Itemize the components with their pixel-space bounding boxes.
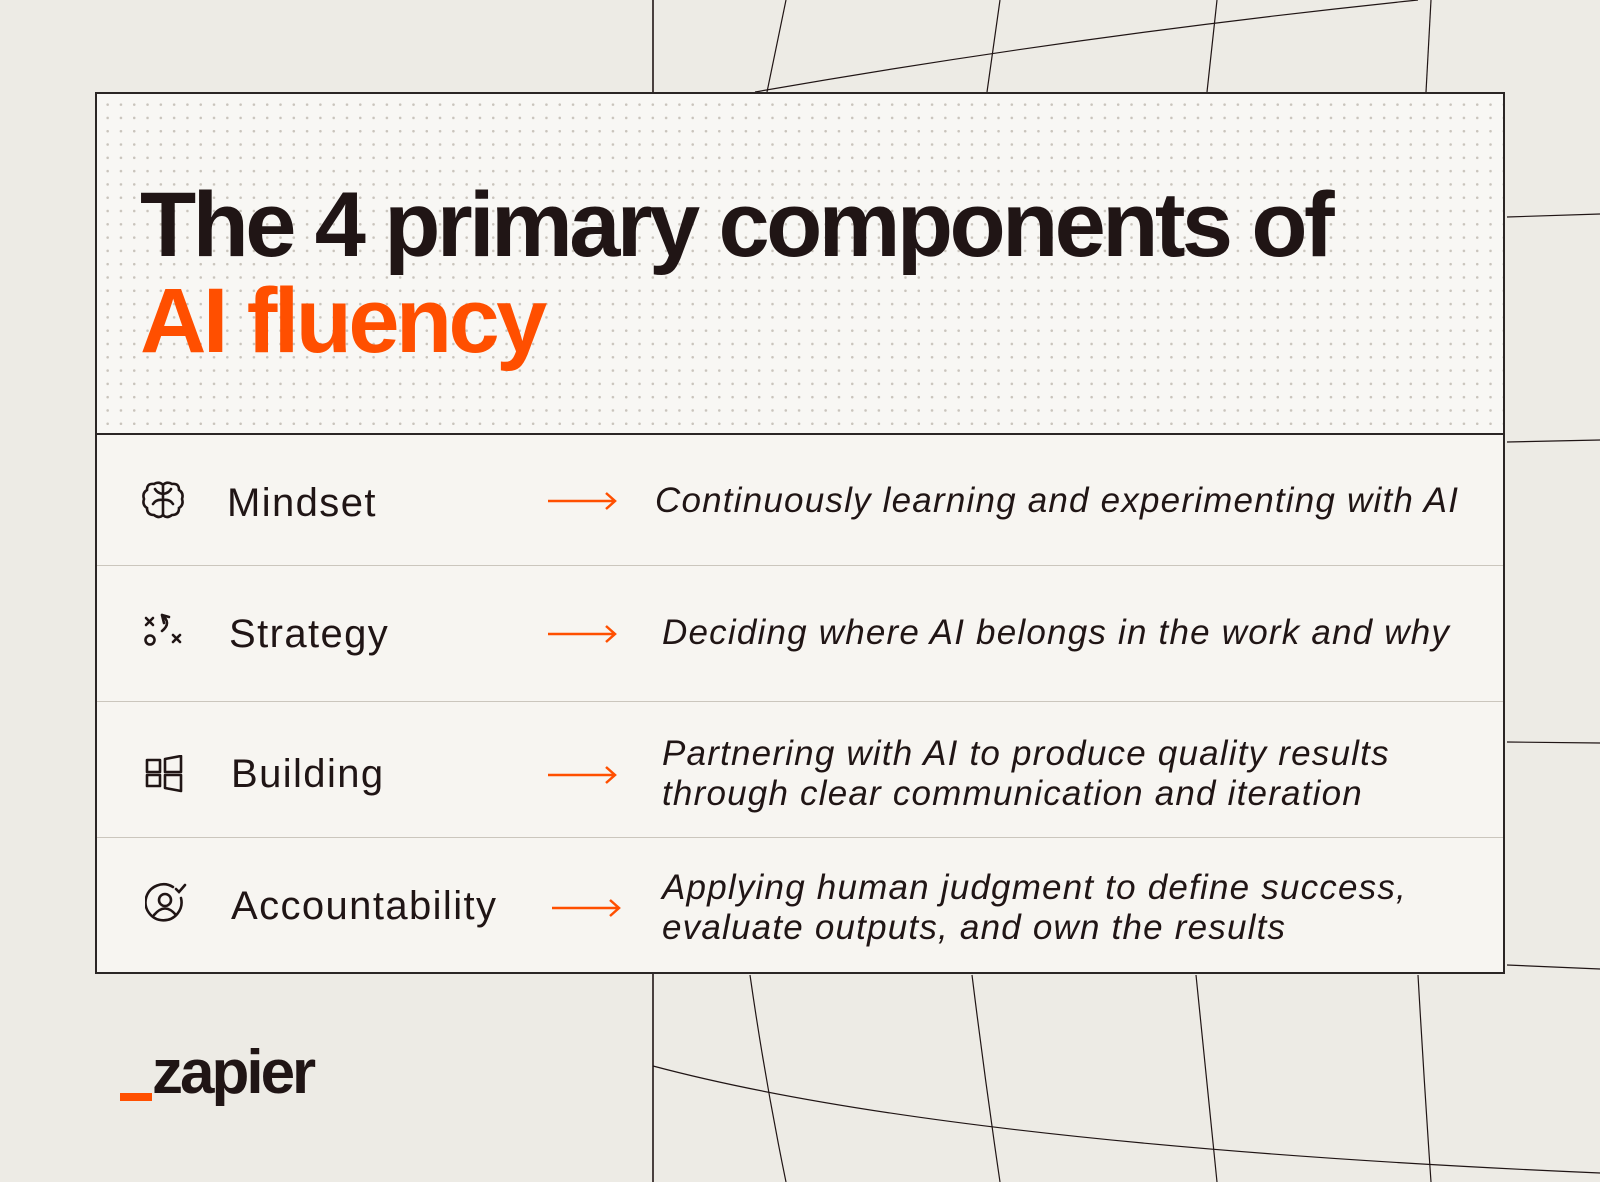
description: Partnering with AI to produce quality results: [662, 734, 1390, 773]
icon: strategy: [144, 614, 182, 646]
description: [662, 734, 1390, 813]
title: The 4 primary components of: [140, 174, 1331, 276]
arrow: [548, 492, 617, 510]
arrow: [548, 625, 617, 643]
icon: brain: [142, 481, 184, 518]
card: [95, 92, 1505, 974]
icon: person check: [145, 882, 186, 922]
description: Deciding where AI belongs in the work and why: [662, 613, 1450, 652]
description: evaluate outputs, and own the results: [662, 908, 1286, 947]
row: strategy: [97, 565, 1503, 702]
description: [660, 868, 1407, 947]
logo: zapier: zapier: [152, 1038, 313, 1107]
description: through clear communication and iteration: [662, 774, 1363, 813]
label: Strategy: [229, 612, 389, 656]
label: Mindset: [227, 481, 377, 525]
description: Continuously learning and experimenting with AI: [655, 481, 1459, 520]
description: Applying human judgment to define success,: [662, 868, 1407, 907]
row: mindset: [142, 481, 1459, 525]
title: [140, 174, 1335, 372]
row: building: [97, 701, 1503, 838]
title: AI fluency: [140, 270, 544, 372]
arrow: [552, 899, 621, 917]
header panel: [97, 94, 1503, 435]
arrow: [548, 766, 617, 784]
label: Building: [231, 752, 385, 796]
icon: building blocks: [146, 755, 182, 792]
label: Accountability: [231, 884, 497, 928]
row: accountability: [97, 837, 1503, 973]
